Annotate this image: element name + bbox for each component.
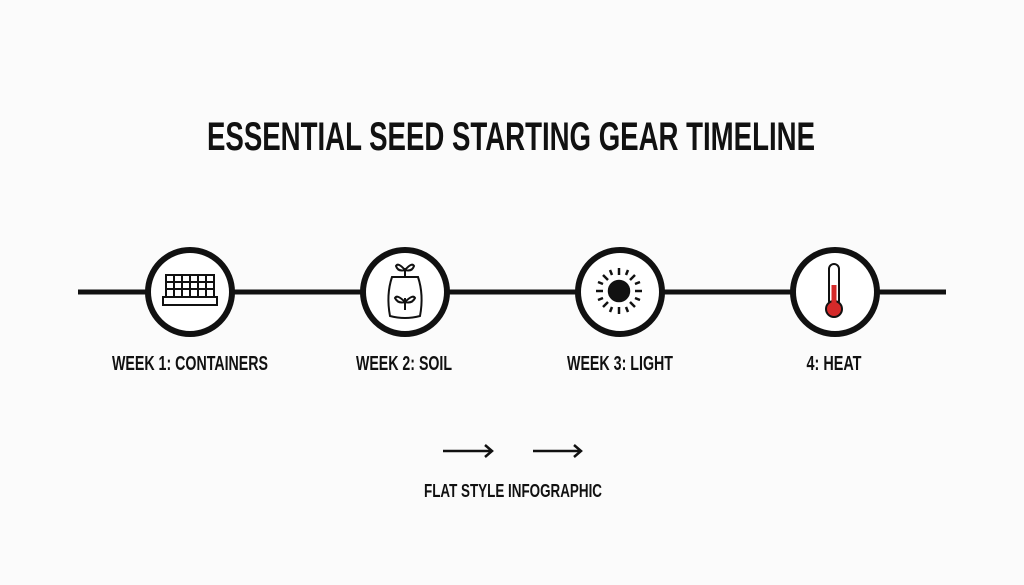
arrow 2 <box>533 445 581 457</box>
step 2: soil <box>356 250 452 375</box>
icon: thermometer <box>826 264 842 317</box>
label 4: 4: HEAT <box>806 353 862 375</box>
icon: soil bag <box>388 265 422 318</box>
label 3: WEEK 3: LIGHT <box>567 353 673 375</box>
label 1: WEEK 1: CONTAINERS <box>112 353 268 375</box>
step 4: heat <box>793 250 877 375</box>
icon: seed tray <box>163 275 217 305</box>
step 3: light <box>567 250 673 375</box>
label 2: WEEK 2: SOIL <box>356 353 452 375</box>
step 1: containers <box>112 250 268 375</box>
footer text: FLAT STYLE INFOGRAPHIC <box>424 481 602 501</box>
arrow 1 <box>443 445 492 457</box>
icon: sun <box>596 268 642 314</box>
timeline line <box>78 290 946 294</box>
